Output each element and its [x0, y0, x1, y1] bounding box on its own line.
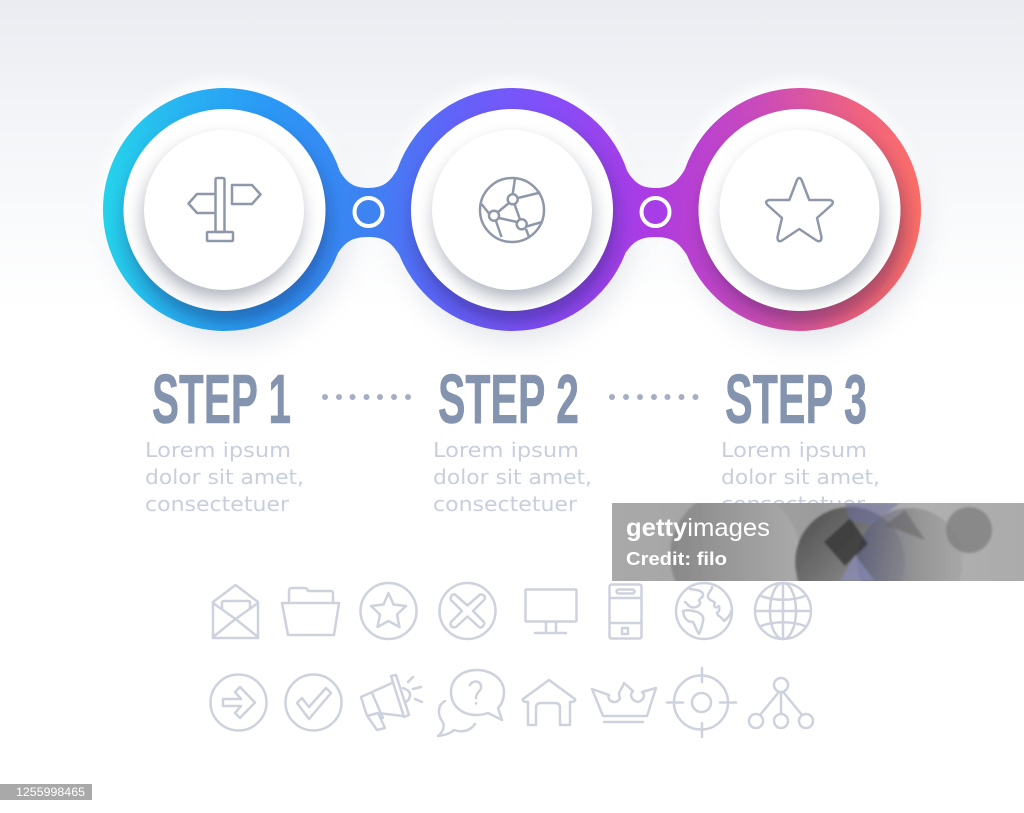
icon: network globe — [480, 178, 544, 242]
icon: cross in circle — [440, 583, 496, 639]
step 1 disc — [124, 109, 326, 311]
step 3 body text — [721, 438, 880, 516]
step 2 body text: Lorem ipsum — [433, 438, 579, 462]
icon: star in circle — [360, 583, 416, 639]
icon: hierarchy — [749, 678, 813, 728]
icon: star — [766, 178, 833, 241]
step 3 body text: dolor sit amet, — [721, 465, 880, 489]
ring halo — [98, 79, 926, 331]
icon: crown — [592, 683, 656, 722]
step 2 body text: dolor sit amet, — [433, 465, 592, 489]
icon: folder — [282, 588, 339, 635]
step 1 body text — [145, 438, 304, 516]
gradient ring band — [95, 80, 930, 340]
step 3 heading: STEP 3 — [725, 360, 867, 438]
icon: smartphone — [610, 584, 642, 638]
step 3 disc — [698, 109, 900, 311]
step 1 body text: Lorem ipsum — [145, 438, 291, 462]
ring drop shadow — [116, 110, 922, 342]
icon: house — [523, 680, 575, 725]
connector node 2 — [642, 198, 670, 226]
icon: target — [667, 668, 736, 737]
icon: arrow in circle — [210, 674, 266, 730]
timeline: three connected rings — [95, 79, 930, 342]
step 1 body text: consectetuer — [145, 492, 290, 516]
step 3 body text: Lorem ipsum — [721, 438, 867, 462]
step 2 body text: consectetuer — [433, 492, 578, 516]
icon: open envelope — [213, 585, 258, 638]
background — [0, 0, 1024, 310]
step 2 body text — [433, 438, 592, 516]
icon: signpost — [188, 178, 260, 241]
dotted connector 2 — [609, 394, 698, 400]
icon: globe — [755, 583, 811, 639]
dotted connector 1 — [322, 394, 411, 400]
watermark banner — [612, 503, 1024, 581]
step 1 heading: STEP 1 — [152, 360, 291, 438]
icon: question speech bubbles — [438, 670, 504, 736]
connector node 1 — [354, 198, 382, 226]
step 3 body text: consectetuer — [721, 492, 866, 516]
step 2 disc — [411, 109, 613, 311]
icon: check in circle — [286, 674, 342, 730]
image id tag — [0, 784, 92, 800]
icon: megaphone — [361, 675, 422, 730]
image id tag: 1255998465 — [16, 787, 85, 799]
step 1 body text: dolor sit amet, — [145, 465, 304, 489]
icon: earth — [676, 583, 732, 639]
step 2 heading: STEP 2 — [438, 360, 579, 438]
getty images logo: gettyimages — [626, 514, 770, 542]
credit line: Credit: filo — [626, 549, 727, 569]
icon: monitor — [526, 590, 576, 633]
icon grid — [210, 583, 813, 737]
